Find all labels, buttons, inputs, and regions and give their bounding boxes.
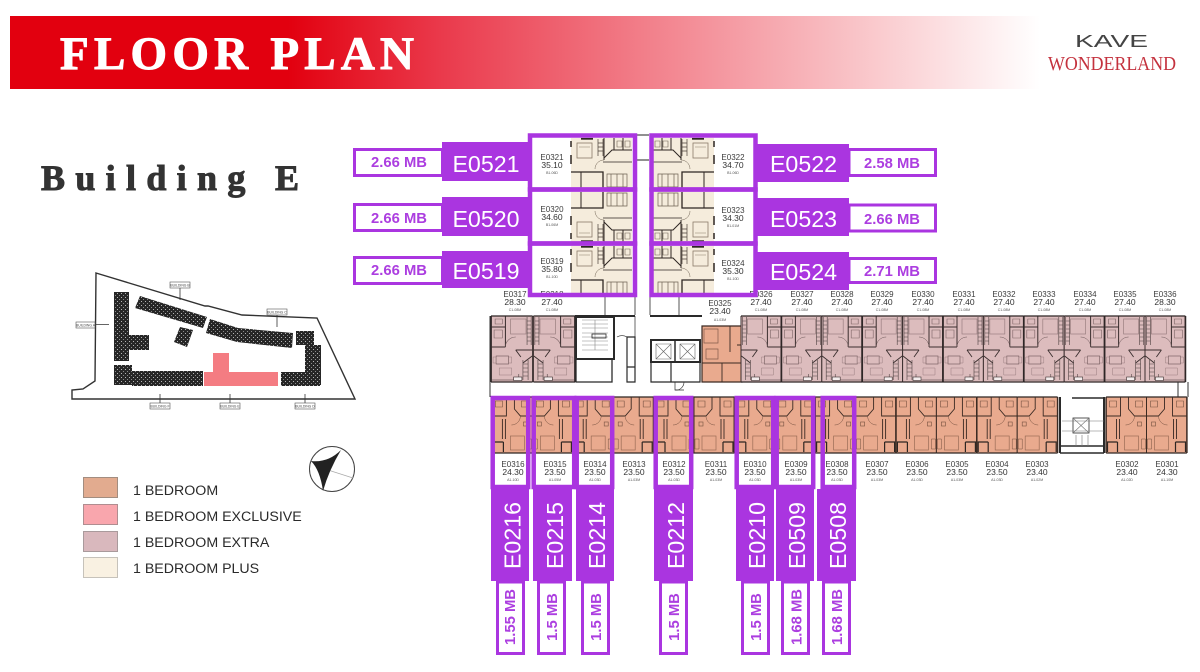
- tag: E0524: [757, 252, 936, 290]
- tag: E0521: [354, 142, 528, 181]
- unit labels: upper wing: C1-08M: [876, 308, 888, 312]
- unit labels: upper wing: C1-08M: [1079, 308, 1091, 312]
- unit labels: upper wing: A1-03M: [714, 318, 726, 322]
- unit labels: upper wing: C1-08M: [998, 308, 1010, 312]
- unit labels: lower wing: 23.50: [744, 467, 766, 477]
- tag: E0509: E0509: [784, 502, 810, 569]
- unit labels: tower wing: E0320: [540, 205, 564, 214]
- unit labels: lower wing: A1-03M: [710, 478, 722, 482]
- unit labels: upper wing: E0326: [749, 290, 773, 299]
- tag: E0210: 1.5 MB: [749, 593, 765, 641]
- legend: 1 bedroom plus: [84, 558, 259, 578]
- unit labels: lower wing: A1-02D: [1121, 478, 1133, 482]
- tag: E0210: E0210: [744, 502, 770, 569]
- unit labels: upper wing: C1-08M: [958, 308, 970, 312]
- unit labels: lower wing: E0305: [945, 460, 969, 469]
- tag: E0523: 2.66 MB: [864, 212, 920, 228]
- header banner: [10, 16, 1040, 89]
- corridor lines: [490, 316, 1188, 397]
- unit labels: tower wing: E0323: [721, 206, 745, 215]
- unit labels: lower wing: E0307: [865, 460, 889, 469]
- unit labels: upper wing: C1-08M: [1159, 308, 1171, 312]
- unit labels: lower wing: 23.50: [705, 467, 727, 477]
- unit labels: lower wing: 23.50: [986, 467, 1008, 477]
- tag: E0509: [776, 489, 814, 654]
- unit labels: lower wing: A1-05M: [549, 478, 561, 482]
- tag: E0519: E0519: [452, 258, 520, 284]
- highlight frames: left tower: [530, 136, 635, 295]
- tag: E0523: E0523: [770, 206, 837, 232]
- unit labels: tower wing: B1-01M: [727, 224, 739, 228]
- tag: E0523: [757, 198, 936, 236]
- unit labels: upper wing: E0327: [790, 290, 814, 299]
- tag: E0521: 2.66 MB: [371, 155, 427, 171]
- tag: E0212: [654, 489, 693, 654]
- legend: [84, 478, 302, 578]
- unit labels: lower wing: 23.50: [866, 467, 888, 477]
- site labels: [76, 282, 315, 409]
- unit labels: upper wing: E0329: [870, 290, 894, 299]
- unit labels: lower wing: A1-03D: [911, 478, 923, 482]
- site plan: BUILDING B: [170, 284, 190, 288]
- unit labels: lower wing: E0310: [743, 460, 767, 469]
- tag: E0522: E0522: [770, 151, 837, 177]
- tag: E0519: 2.66 MB: [371, 263, 427, 279]
- tag: E0214: [576, 489, 614, 654]
- unit labels: lower wing: E0313: [622, 460, 646, 469]
- legend: 1 bedroom exclusive: 1 BEDROOM EXCLUSIVE: [133, 509, 302, 525]
- unit labels: upper wing: E0335: [1113, 290, 1137, 299]
- unit labels: upper wing: E0336: [1153, 290, 1177, 299]
- unit labels: tower wing: B1-06D: [727, 171, 739, 175]
- tag: E0520: [354, 197, 528, 236]
- tag: E0524: 2.71 MB: [864, 264, 920, 280]
- site plan: BUILDING A: [76, 324, 96, 328]
- unit labels: lower wing: E0316: [501, 460, 525, 469]
- unit labels: upper wing: E0328: [830, 290, 854, 299]
- unit labels: tower wing: B1-10D: [546, 275, 558, 279]
- unit labels: upper wing: 27.40: [831, 297, 853, 307]
- unit labels: lower wing: A1-02M: [1031, 478, 1043, 482]
- unit labels: upper wing: 28.30: [1154, 297, 1176, 307]
- unit labels: lower wing: 23.50: [785, 467, 807, 477]
- unit labels: upper wing: 28.30: [504, 297, 526, 307]
- unit labels: tower wing: E0324: [721, 259, 745, 268]
- tag: E0215: 1.5 MB: [545, 593, 561, 641]
- unit labels: tower wing: 35.80: [541, 264, 563, 274]
- tag: E0508: E0508: [825, 502, 851, 569]
- logo: Kave Wonderland: [1048, 31, 1176, 75]
- unit labels: upper wing: [503, 290, 1177, 322]
- unit labels: lower wing: 24.30: [1156, 467, 1178, 477]
- unit labels: upper wing: 27.40: [993, 297, 1015, 307]
- unit labels: upper wing: E0317: [503, 290, 527, 299]
- unit labels: upper wing: E0318: [540, 290, 564, 299]
- unit labels: upper wing: E0330: [911, 290, 935, 299]
- east stair core: [1060, 397, 1104, 453]
- unit labels: tower wing: [540, 153, 745, 281]
- unit labels: upper wing: C1-08M: [546, 308, 558, 312]
- unit labels: lower wing: 23.50: [623, 467, 645, 477]
- unit labels: lower wing: E0314: [583, 460, 607, 469]
- unit labels: upper wing: C1-08M: [917, 308, 929, 312]
- unit labels: lower wing: 23.50: [663, 467, 685, 477]
- tag: E0212: 1.5 MB: [667, 593, 683, 641]
- unit labels: lower wing: 23.50: [584, 467, 606, 477]
- unit labels: tower wing: 34.30: [722, 213, 744, 223]
- tag: E0519: [354, 251, 528, 288]
- unit labels: lower wing: E0304: [985, 460, 1009, 469]
- legend: 1 bedroom extra: 1 BEDROOM EXTRA: [133, 535, 270, 551]
- unit labels: lower wing: E0306: [905, 460, 929, 469]
- unit labels: lower wing: E0309: [784, 460, 808, 469]
- one bedroom units: lower wing: [492, 397, 1187, 453]
- tag: E0520: 2.66 MB: [371, 211, 427, 227]
- legend: 1 bedroom exclusive: [84, 504, 302, 525]
- legend: 1 bedroom plus: 1 BEDROOM PLUS: [133, 561, 259, 577]
- tag: E0214: E0214: [584, 502, 610, 569]
- tag: E0215: E0215: [542, 502, 568, 569]
- unit labels: tower wing: E0322: [721, 153, 745, 162]
- logo: Kave Wonderland: WONDERLAND: [1048, 53, 1176, 75]
- tag: E0212: E0212: [663, 502, 689, 569]
- site plan: [72, 273, 355, 409]
- unit labels: upper wing: C1-08M: [1038, 308, 1050, 312]
- unit labels: lower wing: 23.40: [1116, 467, 1138, 477]
- unit labels: lower wing: E0301: [1155, 460, 1179, 469]
- site plan: BUILDING E: [220, 404, 240, 408]
- unit labels: tower wing: 35.10: [541, 160, 563, 170]
- unit labels: upper wing: 27.40: [541, 297, 563, 307]
- unit labels: upper wing: E0333: [1032, 290, 1056, 299]
- unit labels: lower wing: A1-10D: [507, 478, 519, 482]
- unit labels: upper wing: E0325: [708, 299, 732, 308]
- unit labels: tower wing: 35.30: [722, 266, 744, 276]
- unit labels: lower wing: A1-10M: [1161, 478, 1173, 482]
- unit labels: upper wing: 27.40: [791, 297, 813, 307]
- unit labels: lower wing: [501, 460, 1179, 482]
- unit labels: tower wing: E0321: [540, 153, 564, 162]
- unit labels: tower wing: 34.60: [541, 212, 563, 222]
- plus units: tower wing: [571, 135, 714, 296]
- unit labels: upper wing: 27.40: [953, 297, 975, 307]
- unit labels: lower wing: 23.50: [906, 467, 928, 477]
- unit labels: upper wing: 27.40: [871, 297, 893, 307]
- site plan: BUILDING D: [295, 404, 315, 408]
- tag: E0216: [491, 489, 529, 654]
- highlight frames: lower wing: [493, 398, 854, 487]
- unit labels: lower wing: 24.30: [502, 467, 524, 477]
- tag: E0214: 1.5 MB: [589, 593, 605, 641]
- unit labels: lower wing: 23.40: [1026, 467, 1048, 477]
- unit labels: lower wing: E0311: [705, 460, 728, 469]
- unit labels: upper wing: E0332: [992, 290, 1016, 299]
- icon: north compass: [310, 446, 354, 492]
- unit labels: upper wing: C1-08M: [755, 308, 767, 312]
- unit labels: upper wing: 23.40: [709, 306, 731, 316]
- floor plan drawing: [490, 135, 1188, 482]
- unit labels: lower wing: 23.50: [544, 467, 566, 477]
- unit labels: lower wing: 23.50: [946, 467, 968, 477]
- tag: E0524: E0524: [770, 259, 837, 285]
- tag: E0508: [817, 489, 856, 654]
- unit labels: lower wing: A1-03M: [871, 478, 883, 482]
- one bedroom unit E0325: [702, 326, 742, 382]
- unit labels: upper wing: 27.40: [1033, 297, 1055, 307]
- tag: E0522: [757, 144, 936, 182]
- tag: E0520: E0520: [452, 206, 520, 232]
- unit labels: upper wing: 27.40: [912, 297, 934, 307]
- tag: E0521: E0521: [452, 151, 520, 177]
- tag: E0215: [533, 489, 572, 654]
- unit labels: tower wing: E0319: [540, 257, 564, 266]
- unit labels: upper wing: C1-08M: [1119, 308, 1131, 312]
- unit labels: lower wing: E0308: [825, 460, 849, 469]
- site boundary: [72, 273, 355, 399]
- unit labels: lower wing: A1-03D: [668, 478, 680, 482]
- unit labels: upper wing: C1-08M: [836, 308, 848, 312]
- unit labels: lower wing: A1-03M: [628, 478, 640, 482]
- unit labels: tower wing: 34.70: [722, 160, 744, 170]
- unit labels: lower wing: A1-03D: [749, 478, 761, 482]
- unit labels: upper wing: C1-08M: [509, 308, 521, 312]
- unit labels: upper wing: 27.40: [1074, 297, 1096, 307]
- unit labels: upper wing: 27.40: [750, 297, 772, 307]
- unit labels: upper wing: C1-08M: [796, 308, 808, 312]
- tag: E0216: E0216: [500, 502, 526, 569]
- unit labels: lower wing: A1-03M: [790, 478, 802, 482]
- unit labels: lower wing: A1-03D: [831, 478, 843, 482]
- unit labels: upper wing: E0334: [1073, 290, 1097, 299]
- tag: E0509: 1.68 MB: [790, 589, 806, 645]
- legend: 1 bedroom: 1 BEDROOM: [133, 483, 218, 499]
- unit labels: lower wing: A1-03D: [991, 478, 1003, 482]
- unit labels: tower wing: B1-06D: [546, 171, 558, 175]
- extra units: upper wing right: [741, 316, 1185, 382]
- logo: Kave Wonderland: KAVE: [1075, 31, 1148, 51]
- unit labels: lower wing: A1-03M: [951, 478, 963, 482]
- building E highlight: [204, 353, 278, 386]
- tag: E0522: 2.58 MB: [864, 156, 920, 172]
- site plan: BUILDING F: [150, 404, 170, 408]
- highlight frames: right tower: [652, 136, 756, 295]
- title: FLOOR PLAN: [60, 28, 414, 80]
- extra units: upper wing left: [491, 316, 575, 382]
- tag: E0216: 1.55 MB: [503, 589, 519, 645]
- unit labels: lower wing: E0303: [1025, 460, 1049, 469]
- site plan: BUILDING C: [267, 310, 287, 314]
- unit labels: lower wing: E0315: [543, 460, 567, 469]
- tag: E0210: [736, 489, 774, 654]
- legend: 1 bedroom extra: [84, 532, 270, 552]
- unit labels: upper wing: 27.40: [1114, 297, 1136, 307]
- building blocks: [114, 292, 321, 386]
- tag: E0508: 1.68 MB: [830, 589, 846, 645]
- legend: 1 bedroom: [84, 478, 218, 499]
- stair and lift core: [575, 297, 702, 390]
- building heading: Building E: [41, 158, 299, 198]
- unit labels: lower wing: E0302: [1115, 460, 1139, 469]
- unit labels: tower wing: B1-06M: [546, 223, 558, 227]
- unit labels: tower wing: B1-10D: [727, 277, 739, 281]
- unit labels: lower wing: E0312: [662, 460, 686, 469]
- unit labels: lower wing: A1-03D: [589, 478, 601, 482]
- unit labels: lower wing: 23.50: [826, 467, 848, 477]
- unit labels: upper wing: E0331: [952, 290, 976, 299]
